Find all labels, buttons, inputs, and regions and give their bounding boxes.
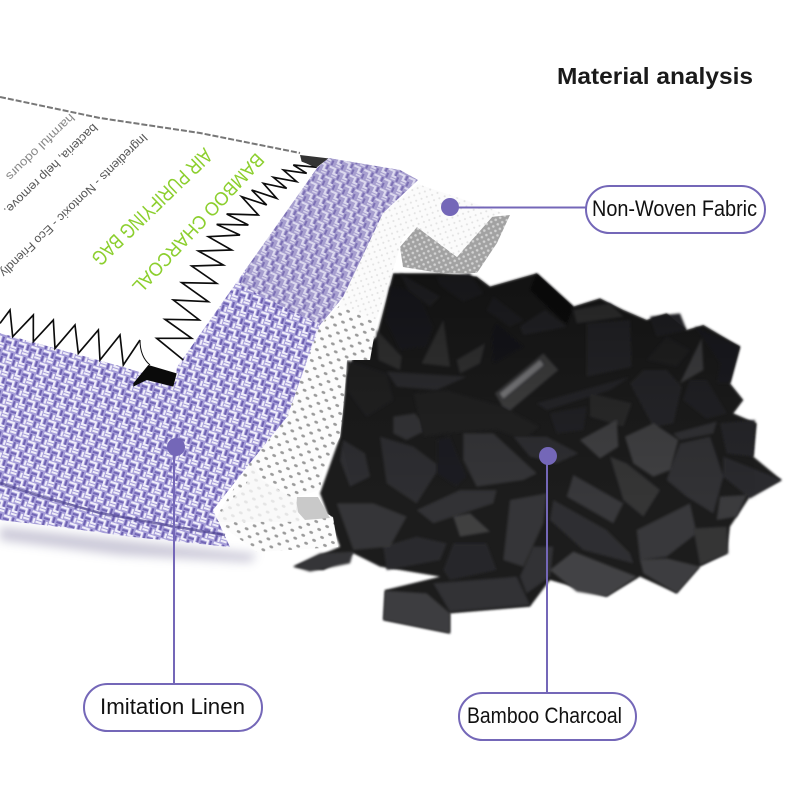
non-woven fabric: white fold highlight <box>214 463 300 522</box>
callout: Bamboo Charcoal <box>459 447 636 740</box>
non-woven fabric: inner grey layer <box>400 215 510 273</box>
description line 3: harmful odours <box>3 111 78 183</box>
charcoal base mass <box>293 273 782 633</box>
label small description text <box>0 111 151 280</box>
charcoal chips <box>293 273 782 633</box>
label stitching zigzag <box>0 155 328 387</box>
marker dot <box>167 438 185 456</box>
label text: Bamboo Charcoal <box>467 703 622 728</box>
pill label <box>459 693 636 740</box>
pill label <box>84 684 262 731</box>
heading: Material analysis: Material analysis <box>557 63 753 89</box>
leader line <box>173 447 175 684</box>
non-woven fabric: lower dotted layer <box>214 305 377 552</box>
description line 1: Ingredients - Nontoxic - Eco Friendly <box>0 131 151 280</box>
non-woven fabric: crumpled fold <box>296 497 330 520</box>
label green title <box>87 143 268 297</box>
non-woven fabric: upper white layer <box>336 184 503 345</box>
callout: Imitation Linen <box>84 438 262 731</box>
title line: Air Purifying Bag: AIR PURIFYING BAG <box>87 143 217 270</box>
leader line <box>450 206 586 208</box>
callout: Non-Woven Fabric <box>441 186 765 233</box>
darker shading over the top of the pile <box>340 273 757 503</box>
label top edge stitching <box>0 97 300 153</box>
description line 2: bacteria, help remove. <box>1 121 101 218</box>
white product label <box>0 97 328 383</box>
label text: Non-Woven Fabric <box>592 196 757 221</box>
title line: Bamboo Charcoal: BAMBOO CHARCOAL <box>128 149 268 297</box>
bag shadow <box>0 527 257 562</box>
linen bag body <box>0 158 418 547</box>
marker dot <box>441 198 459 216</box>
pill label <box>586 186 765 233</box>
linen bottom seam <box>0 483 225 535</box>
charcoal pile <box>293 273 782 633</box>
linen top flap, duller <box>240 158 418 325</box>
leader line <box>546 456 548 693</box>
marker dot <box>539 447 557 465</box>
label text: Imitation Linen <box>100 694 245 719</box>
